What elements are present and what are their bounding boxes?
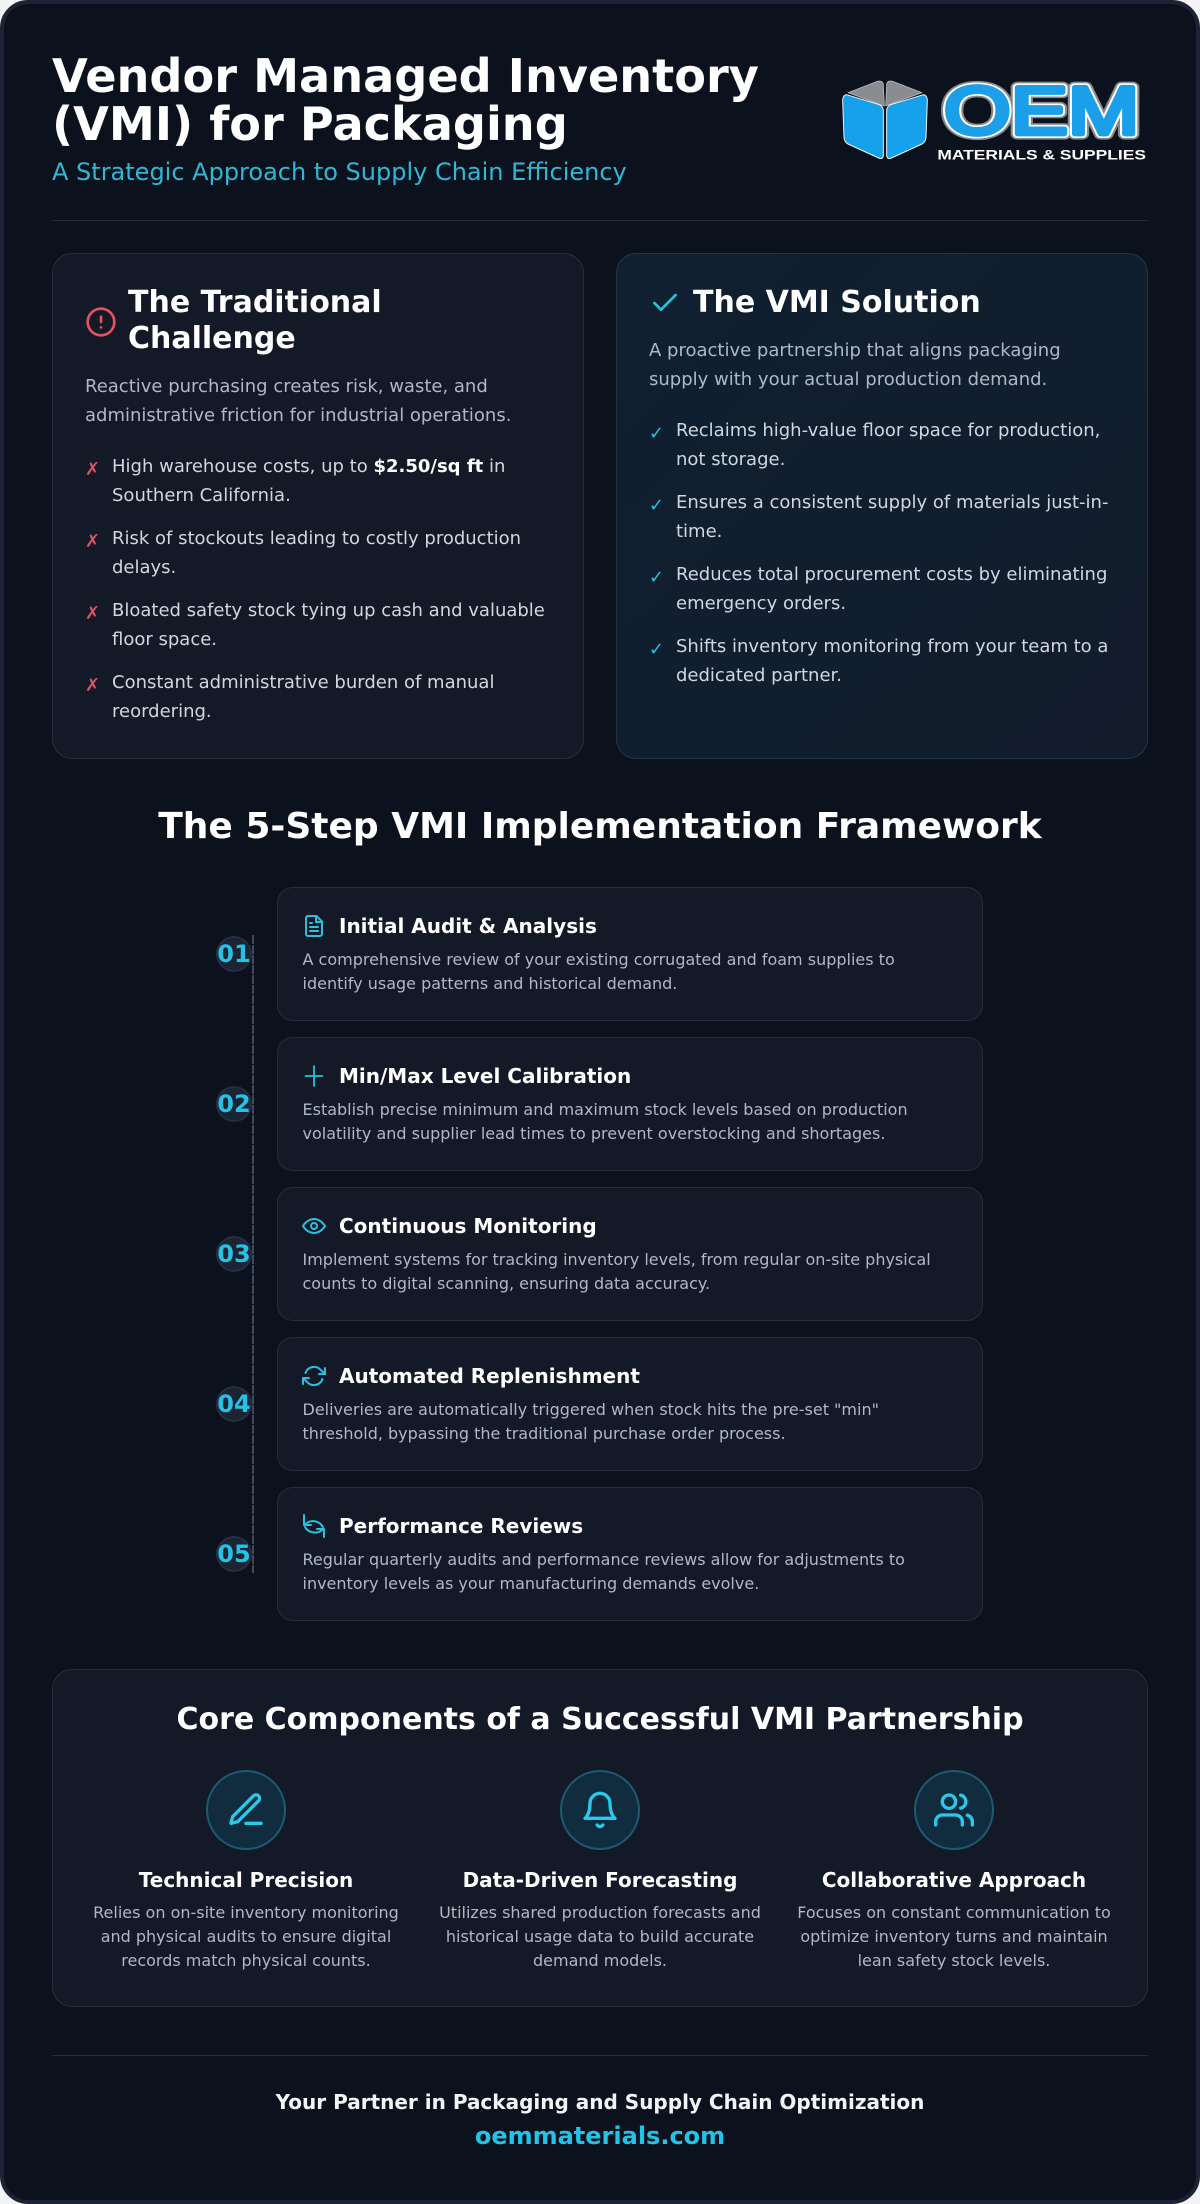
- list item 4: reordering.: [112, 701, 212, 722]
- list item 2: [649, 492, 1108, 542]
- list item 2: Ensures a consistent supply of materials just-in-: [676, 492, 1108, 513]
- list item 4: ✓: [649, 639, 664, 660]
- heading: The VMI Solution: [693, 285, 981, 320]
- component title: Collaborative Approach: [822, 1868, 1086, 1892]
- logo: OEM Materials & Supplies: OEM: [944, 73, 1139, 149]
- intro text: administrative friction for industrial operations.: [85, 405, 511, 426]
- heading: The Traditional: [128, 285, 382, 320]
- intro text: [649, 340, 1061, 390]
- icon circle: bell: [560, 1770, 640, 1850]
- list item 1: Southern California.: [112, 485, 291, 506]
- heading: [128, 285, 382, 356]
- step number 01: 01: [217, 940, 251, 968]
- component title: Data-Driven Forecasting: [463, 1868, 737, 1892]
- icon: review cycle: [303, 1514, 325, 1538]
- list item 4: ✗: [85, 675, 100, 696]
- step 4 card: [277, 1337, 983, 1471]
- step description: [302, 1400, 879, 1443]
- component description: optimize inventory turns and maintain: [800, 1927, 1108, 1946]
- step description: threshold, bypassing the traditional purchase order process.: [302, 1424, 786, 1443]
- step 1 card: [277, 887, 983, 1021]
- timeline line: [252, 935, 254, 1573]
- step title: Min/Max Level Calibration: [339, 1064, 631, 1088]
- list item 4: Constant administrative burden of manual: [112, 672, 494, 693]
- list item 3: Reduces total procurement costs by eliminating: [676, 564, 1107, 585]
- list item 2: [85, 528, 521, 578]
- title: (VMI) for Packaging: [52, 97, 568, 151]
- step description: A comprehensive review of your existing corrugated and foam supplies to: [302, 950, 895, 969]
- component description: lean safety stock levels.: [858, 1951, 1050, 1970]
- step description: Establish precise minimum and maximum stock levels based on production: [302, 1100, 908, 1119]
- component title: Technical Precision: [139, 1868, 353, 1892]
- list item 4: Shifts inventory monitoring from your team to a: [676, 636, 1108, 657]
- component description: [797, 1903, 1111, 1970]
- component description: [439, 1903, 761, 1970]
- panel: VMI solution: [616, 253, 1148, 759]
- step 5 card: [277, 1487, 983, 1621]
- list item 3: Bloated safety stock tying up cash and valuable: [112, 600, 545, 621]
- list item 1: not storage.: [676, 449, 785, 470]
- component description: demand models.: [533, 1951, 667, 1970]
- list item 2: time.: [676, 521, 722, 542]
- icon: document: [305, 915, 323, 937]
- list item 1: [85, 456, 505, 506]
- list item 2: Risk of stockouts leading to costly production: [112, 528, 521, 549]
- panel: traditional challenge: [52, 253, 584, 759]
- list item 1: [649, 420, 1100, 470]
- list item 3: emergency orders.: [676, 593, 846, 614]
- step title: Automated Replenishment: [339, 1364, 640, 1388]
- step description: counts to digital scanning, ensuring data accuracy.: [302, 1274, 710, 1293]
- component description: Utilizes shared production forecasts and: [439, 1903, 761, 1922]
- intro text: A proactive partnership that aligns packaging: [649, 340, 1061, 361]
- list item 4: [649, 636, 1108, 686]
- list item 2: ✓: [649, 495, 664, 516]
- list item 3: floor space.: [112, 629, 217, 650]
- step title: Performance Reviews: [339, 1514, 583, 1538]
- footer tagline: Your Partner in Packaging and Supply Chain Optimization: [276, 2090, 924, 2114]
- icon: eye: [302, 1218, 326, 1234]
- component description: records match physical counts.: [121, 1951, 371, 1970]
- list item 1: Reclaims high-value floor space for production,: [676, 420, 1100, 441]
- list item 2: ✗: [85, 531, 100, 552]
- title: [52, 49, 759, 151]
- component description: [93, 1903, 399, 1970]
- list item 2: delays.: [112, 557, 176, 578]
- heading: Challenge: [128, 321, 296, 356]
- step description: [302, 1250, 931, 1293]
- step description: inventory levels as your manufacturing demands evolve.: [302, 1574, 759, 1593]
- step number 04: 04: [217, 1390, 251, 1418]
- list item 1: ✗: [85, 459, 100, 480]
- list item 1: High warehouse costs, up to $2.50/sq ft in: [112, 456, 505, 477]
- step number 03: 03: [217, 1240, 251, 1268]
- step 2 card: [277, 1037, 983, 1171]
- step description: [302, 1100, 908, 1143]
- step description: identify usage patterns and historical demand.: [302, 974, 677, 993]
- logo: OEM Materials & Supplies: MATERIALS & SUPPLIES: [937, 147, 1146, 162]
- step description: volatility and supplier lead times to prevent overstocking and shortages.: [302, 1124, 885, 1143]
- step description: Deliveries are automatically triggered when stock hits the pre-set "min": [302, 1400, 879, 1419]
- logo: OEM Materials & Supplies: OEM: [944, 73, 1139, 149]
- step number 05: 05: [217, 1540, 251, 1568]
- subtitle: A Strategic Approach to Supply Chain Efficiency: [52, 158, 627, 186]
- step description: Implement systems for tracking inventory levels, from regular on-site physical: [302, 1250, 931, 1269]
- component description: and physical audits to ensure digital: [101, 1927, 391, 1946]
- list item 3: [85, 600, 545, 650]
- intro text: supply with your actual production demand.: [649, 369, 1047, 390]
- panel: core components: [52, 1669, 1148, 2006]
- component description: Focuses on constant communication to: [797, 1903, 1111, 1922]
- intro text: [85, 376, 511, 426]
- list item 3: ✓: [649, 567, 664, 588]
- heading: Core Components of a Successful VMI Partnership: [176, 1702, 1024, 1737]
- title: Vendor Managed Inventory: [52, 49, 759, 103]
- component description: Relies on on-site inventory monitoring: [93, 1903, 399, 1922]
- icon: alert circle: [86, 307, 116, 337]
- list item 1: ✓: [649, 423, 664, 444]
- icon: refresh: [302, 1366, 326, 1386]
- list item 3: [649, 564, 1107, 614]
- logo: OEM Materials & Supplies: [842, 73, 1146, 162]
- list item 4: dedicated partner.: [676, 665, 842, 686]
- list item 3: ✗: [85, 603, 100, 624]
- step title: Continuous Monitoring: [339, 1214, 597, 1238]
- heading: framework: The 5-Step VMI Implementation Framework: [158, 806, 1042, 846]
- step description: [302, 950, 895, 993]
- step description: Regular quarterly audits and performance reviews allow for adjustments to: [302, 1550, 905, 1569]
- icon circle: users: [914, 1770, 994, 1850]
- intro text: Reactive purchasing creates risk, waste, and: [85, 376, 488, 397]
- icon circle: pen: [206, 1770, 286, 1850]
- icon: check: [653, 294, 677, 312]
- footer link: oemmaterials.com: [475, 2122, 725, 2150]
- step 3 card: [277, 1187, 983, 1321]
- list item 4: [85, 672, 494, 722]
- step title: Initial Audit & Analysis: [339, 914, 597, 938]
- step number 02: 02: [217, 1090, 251, 1118]
- logo: OEM Materials & Supplies: OEM: [944, 73, 1139, 149]
- component description: historical usage data to build accurate: [446, 1927, 754, 1946]
- step description: [302, 1550, 905, 1593]
- icon: plus: [304, 1065, 324, 1087]
